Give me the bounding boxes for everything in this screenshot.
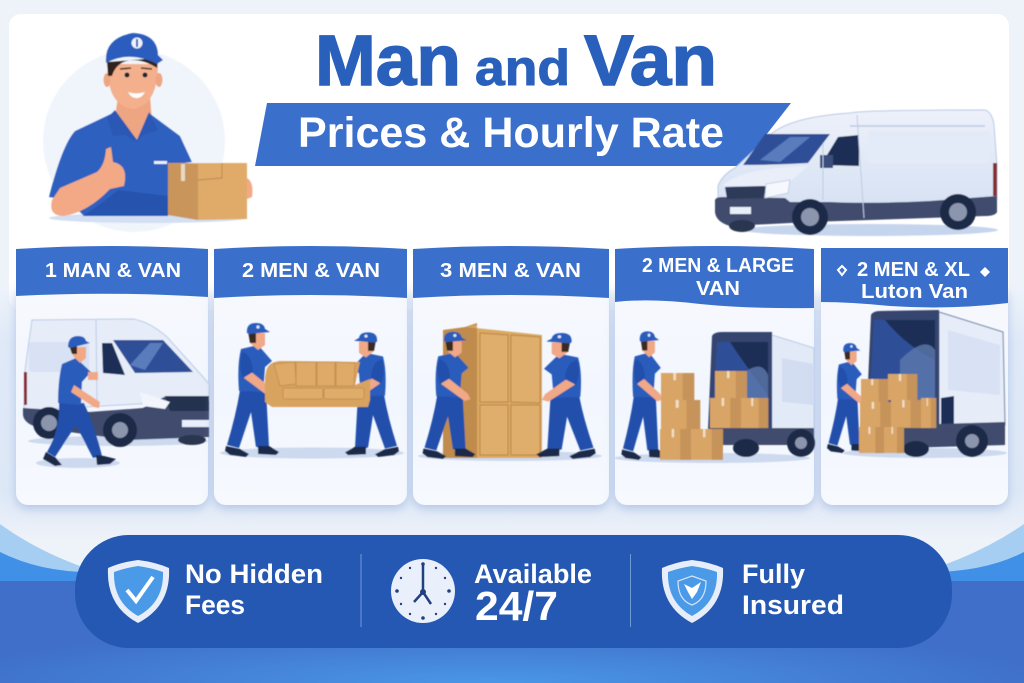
card header: Luton Van <box>861 281 968 303</box>
card header: 1 MAN & VAN <box>45 260 181 282</box>
benefit: no hidden fees: No Hidden <box>185 559 323 589</box>
card body <box>16 285 208 505</box>
subtitle ribbon <box>255 103 791 166</box>
title: Van <box>584 22 717 101</box>
title <box>315 22 717 101</box>
card header <box>821 248 1008 307</box>
card header <box>214 246 407 298</box>
decorative blue waves <box>0 524 1024 683</box>
icon: insurance shield <box>662 560 723 623</box>
illustration: white van <box>715 110 998 236</box>
card header <box>615 246 814 308</box>
benefit: available 24/7: 24/7 <box>475 583 558 629</box>
card header <box>16 246 208 297</box>
card header: 2 MEN & LARGE <box>642 255 794 277</box>
card header: 2 MEN & XL <box>857 259 970 281</box>
card body <box>615 285 814 505</box>
icon: clock <box>391 559 455 623</box>
illustration: mover loading Luton van <box>827 310 1007 458</box>
card header: 3 MEN & VAN <box>440 260 581 282</box>
pricing card: 2 men and large van <box>614 246 815 505</box>
pricing card: 1 man and van <box>16 246 209 505</box>
illustration: two movers carrying wardrobe <box>418 323 602 461</box>
benefit: fully insured: Insured <box>742 590 844 620</box>
card body <box>413 285 609 505</box>
benefit: no hidden fees: Fees <box>185 590 245 620</box>
title: and <box>475 40 570 96</box>
benefit: fully insured: Fully <box>742 559 805 589</box>
card header: 2 MEN & VAN <box>242 260 380 282</box>
pricing card: 3 men and van <box>413 246 609 505</box>
icon: header diamond left <box>838 266 846 275</box>
illustration: van and walking mover <box>23 319 209 468</box>
subtitle ribbon: Prices & Hourly Rate <box>298 109 724 157</box>
illustration: two movers carrying sofa <box>220 323 404 458</box>
title: Man <box>315 22 461 101</box>
icon: header diamond right <box>980 267 990 277</box>
pricing card: 2 men and XL Luton van <box>821 248 1008 505</box>
benefit: no hidden fees <box>185 559 323 620</box>
mascot: delivery man with parcel <box>43 33 252 232</box>
benefit: fully insured <box>742 559 844 620</box>
card header: VAN <box>696 278 740 300</box>
benefits bar <box>75 535 952 648</box>
top white panel <box>9 14 1009 310</box>
icon: shield with check <box>108 560 169 623</box>
illustration: mover loading large van <box>614 331 815 463</box>
card body <box>214 285 407 505</box>
benefit: available 24/7: Available <box>474 559 592 589</box>
card body <box>821 285 1008 505</box>
benefit: available 24/7 <box>474 559 592 629</box>
card header <box>413 246 609 298</box>
pricing card: 2 men and van <box>214 246 407 505</box>
